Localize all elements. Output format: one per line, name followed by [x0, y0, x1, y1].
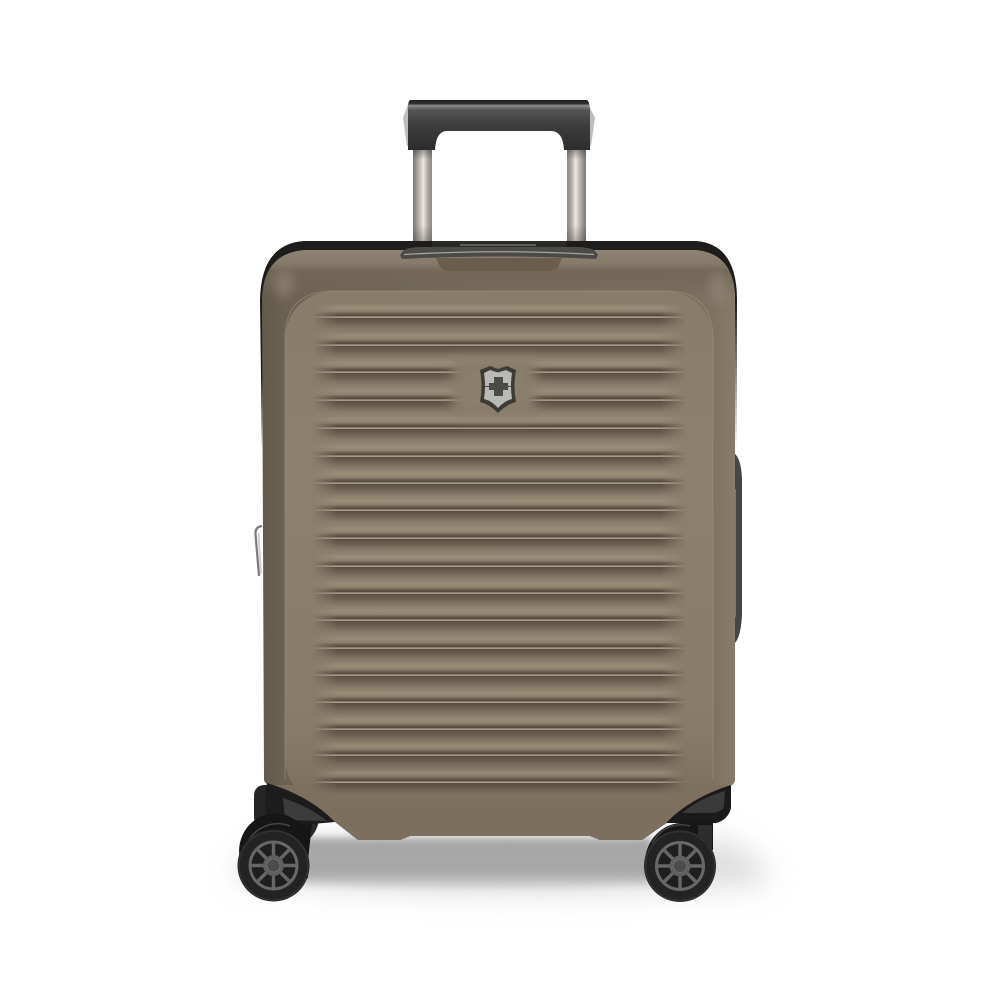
suitcase body: [255, 241, 745, 845]
inner panel: [285, 291, 713, 806]
corner highlights: [273, 271, 727, 300]
corner bumper right: [666, 785, 731, 823]
front shell: [255, 245, 745, 845]
telescopic handle: [403, 100, 595, 244]
side handle: [727, 453, 742, 643]
top handle housing: [400, 241, 598, 271]
corner bumper left: [265, 783, 335, 836]
side latch: [255, 526, 262, 576]
logo shield: [480, 366, 516, 413]
wheel rear left: [254, 785, 320, 840]
wheel front left: [238, 813, 312, 902]
handle side caps: [403, 104, 595, 146]
ridges: [300, 303, 700, 796]
ground shadow: [235, 838, 767, 894]
rear shell and zip: [260, 241, 737, 450]
lower shell shade: [274, 785, 732, 840]
product illustration: suitcase: [234, 100, 770, 903]
handle grip: [408, 100, 590, 150]
handle pole right: [567, 148, 586, 244]
handle pole left: [413, 148, 432, 244]
wheel front right: [644, 823, 716, 902]
